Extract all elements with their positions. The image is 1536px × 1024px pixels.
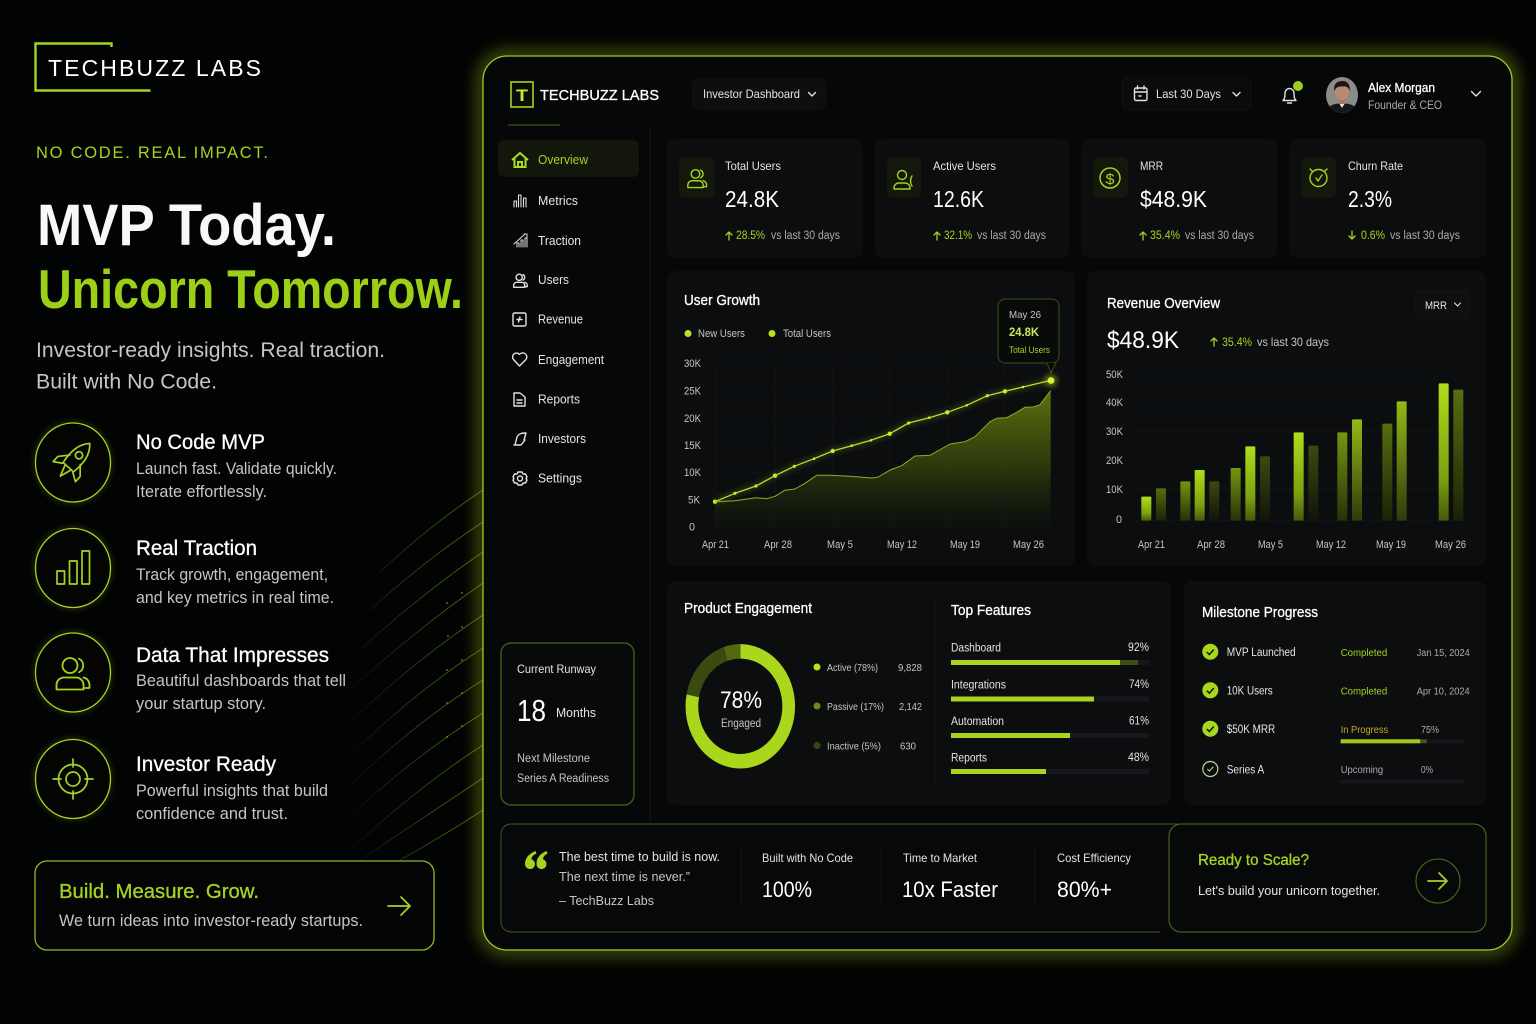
quote: The best time to build is now. — [559, 850, 720, 864]
donut label: Engaged — [721, 718, 761, 730]
y axis labels: 0 — [1116, 514, 1122, 526]
tooltip — [998, 299, 1059, 373]
feature: data that impresses: your startup story. — [136, 695, 266, 713]
kpi: churn rate: 0.6% — [1361, 230, 1385, 242]
feature: no code mvp: Iterate effortlessly. — [136, 483, 267, 501]
y axis labels: 30K — [684, 358, 702, 370]
feature: investor ready: Powerful insights that build — [136, 782, 328, 800]
x axis labels — [702, 539, 1044, 551]
icon: quote mark — [525, 851, 548, 869]
mrr selector: MRR — [1425, 300, 1447, 312]
y axis labels: 30K — [1106, 426, 1124, 438]
feature bar: reports: 48% — [1128, 752, 1149, 764]
bar chart — [1135, 374, 1468, 521]
feature bar: automation: Automation — [951, 716, 1004, 728]
user name: Alex Morgan — [1368, 81, 1435, 95]
kpi: churn rate — [1289, 139, 1486, 258]
total users line — [713, 380, 1051, 504]
nav: overview active — [498, 140, 639, 177]
milestone: 50k mrr: $50K MRR — [1227, 724, 1275, 736]
panel: current runway: Next Milestone — [517, 753, 590, 765]
callout: build measure grow — [35, 861, 434, 950]
kpi: total users: vs last 30 days — [771, 230, 840, 242]
kpi: mrr: $ — [1106, 171, 1115, 188]
tagline: NO CODE. REAL IMPACT. — [36, 144, 268, 162]
dashboard logo: TECHBUZZ LABS — [540, 88, 659, 104]
legend: Total Users — [783, 328, 831, 340]
nav: revenue: Revenue — [538, 312, 583, 326]
decorative specks — [446, 592, 463, 738]
nav: revenue — [513, 312, 583, 326]
panel: current runway: Months — [556, 706, 596, 720]
y axis labels — [1106, 369, 1124, 526]
intro text — [36, 338, 385, 394]
headline: MVP Today. — [37, 193, 336, 258]
y axis labels: 20K — [684, 413, 702, 425]
icon: notification bell — [1283, 81, 1303, 103]
y axis labels: 25K — [684, 386, 702, 398]
feature bar: reports: Reports — [951, 752, 987, 764]
feature: no code mvp — [36, 423, 337, 502]
panel: milestone progress — [1184, 581, 1486, 805]
kpi: active users — [875, 139, 1069, 258]
x axis labels: May 19 — [950, 539, 980, 551]
x axis labels: May 19 — [1376, 539, 1406, 551]
kpi: churn rate: 2.3% — [1348, 186, 1392, 212]
x axis labels: May 12 — [1316, 539, 1346, 551]
call to action: ready to scale — [1169, 824, 1486, 932]
panel: current runway: Series A Readiness — [517, 773, 609, 785]
feature bar: integrations — [951, 679, 1149, 702]
call to action: ready to scale: Ready to Scale? — [1198, 852, 1309, 869]
heading: top features: Top Features — [951, 603, 1031, 619]
nav: metrics: Metrics — [538, 194, 578, 208]
dashboard logo — [508, 82, 659, 125]
feature bar: integrations: 74% — [1129, 679, 1149, 691]
x axis labels: Apr 28 — [1197, 539, 1225, 551]
feature: investor ready — [36, 740, 328, 823]
donut chart — [692, 651, 789, 761]
tooltip: May 26 — [1009, 309, 1041, 321]
y axis labels — [684, 358, 702, 534]
user name — [1368, 81, 1480, 112]
donut legend: 630 — [900, 740, 916, 752]
milestone: 50k mrr — [1202, 721, 1464, 743]
intro text: Built with No Code. — [36, 370, 217, 394]
revenue value: $48.9K — [1107, 327, 1179, 354]
investor dashboard dropdown — [692, 78, 826, 110]
kpi: active users: Active Users — [933, 159, 996, 173]
mrr selector — [1415, 291, 1469, 318]
nav: reports — [514, 392, 580, 406]
heading: revenue overview: Revenue Overview — [1107, 296, 1220, 312]
feature bar: dashboard: 92% — [1128, 642, 1149, 654]
milestone: 50k mrr: 75% — [1421, 724, 1439, 736]
feature bar: integrations: Integrations — [951, 680, 1006, 692]
x axis labels: Apr 21 — [702, 539, 729, 551]
milestone: mvp launched: Completed — [1341, 647, 1387, 659]
stat: built with no code: 100% — [762, 877, 812, 902]
date range dropdown — [1122, 78, 1251, 110]
panel: current runway: Current Runway — [517, 662, 596, 676]
kpi: mrr: $48.9K — [1140, 186, 1208, 212]
quote: – TechBuzz Labs — [559, 894, 654, 908]
milestone: series a: 0% — [1421, 764, 1433, 776]
heading: milestone progress: Milestone Progress — [1202, 605, 1318, 621]
panel: current runway: 18 — [517, 693, 546, 728]
panel: product engagement and top features — [667, 581, 1171, 805]
revenue delta: vs last 30 days — [1257, 335, 1329, 349]
feature bar: automation: 61% — [1129, 716, 1149, 728]
highlighted data point — [1045, 374, 1057, 386]
nav: engagement: Engagement — [538, 353, 604, 367]
legend: New Users — [698, 328, 745, 340]
heading: user growth: User Growth — [684, 293, 760, 309]
feature: data that impresses: Data That Impresses — [136, 643, 329, 667]
dashboard logo: T — [516, 86, 529, 105]
kpi: total users: 28.5% — [736, 230, 765, 242]
y axis labels: 40K — [1106, 397, 1124, 409]
milestone: series a — [1203, 762, 1464, 783]
stat: time to market — [902, 851, 998, 902]
nav: traction: Traction — [538, 234, 581, 248]
x axis labels: Apr 28 — [764, 539, 792, 551]
feature: real traction — [36, 528, 334, 608]
donut legend: 9,828 — [898, 662, 922, 674]
stat: time to market: 10x Faster — [902, 877, 998, 902]
nav: users — [514, 273, 569, 287]
legend — [684, 328, 831, 340]
callout: build measure grow: We turn ideas into investor-ready startups. — [59, 912, 363, 930]
x axis labels: May 5 — [827, 539, 853, 551]
call to action: ready to scale: Let's build your unicorn together. — [1198, 884, 1380, 898]
kpi: total users: 24.8K — [725, 186, 780, 212]
donut legend: Passive (17%) — [827, 701, 884, 713]
kpi: churn rate: vs last 30 days — [1390, 230, 1460, 242]
callout: build measure grow: Build. Measure. Grow. — [59, 880, 259, 903]
kpi: active users: 12.6K — [933, 186, 985, 212]
kpi: active users: vs last 30 days — [977, 230, 1046, 242]
milestone: 10k users — [1202, 682, 1470, 698]
milestone: 10k users: Completed — [1341, 686, 1387, 698]
milestone: 10k users: 10K Users — [1227, 686, 1273, 698]
revenue delta — [1211, 335, 1329, 349]
headline — [37, 193, 463, 320]
stat: cost efficiency: 80%+ — [1057, 877, 1112, 902]
date range dropdown: Last 30 Days — [1156, 87, 1221, 101]
revenue delta: 35.4% — [1222, 335, 1252, 349]
y axis labels: 0 — [689, 522, 695, 534]
kpi: churn rate: Churn Rate — [1348, 159, 1403, 173]
y axis labels: 5K — [688, 494, 701, 506]
panel: revenue overview — [1087, 271, 1486, 566]
nav: traction — [514, 234, 581, 248]
y axis labels: 20K — [1106, 455, 1124, 467]
investor dashboard dropdown: Investor Dashboard — [703, 87, 800, 101]
decorative wave lines — [335, 490, 483, 860]
x axis labels: May 26 — [1013, 539, 1044, 551]
kpi: mrr: MRR — [1140, 159, 1163, 173]
kpi: mrr: 35.4% — [1150, 230, 1180, 242]
area fill — [715, 391, 1051, 527]
milestone: series a: Upcoming — [1341, 764, 1383, 776]
x axis labels: May 5 — [1258, 539, 1283, 551]
feature bar: automation — [951, 716, 1149, 738]
nav: metrics — [514, 194, 578, 208]
nav: settings — [513, 472, 582, 486]
nav: engagement — [513, 353, 604, 367]
feature bar: dashboard: Dashboard — [951, 642, 1001, 654]
brand logo: TECHBUZZ LABS — [48, 55, 261, 81]
x axis labels: Apr 21 — [1138, 539, 1165, 551]
feature: investor ready: confidence and trust. — [136, 805, 288, 823]
stat: cost efficiency: Cost Efficiency — [1057, 851, 1131, 865]
avatar — [1326, 77, 1358, 113]
feature: investor ready: Investor Ready — [136, 752, 276, 776]
donut label — [720, 687, 762, 730]
donut legend: Active (78%) — [827, 662, 878, 674]
dashboard panel — [483, 56, 1512, 950]
feature: real traction: Real Traction — [136, 536, 257, 560]
nav: reports: Reports — [538, 392, 580, 406]
stat: time to market: Time to Market — [903, 851, 978, 865]
stat: built with no code: Built with No Code — [762, 851, 853, 865]
y axis labels: 10K — [1106, 484, 1124, 496]
tooltip: Total Users — [1009, 345, 1050, 355]
quote: The next time is never.” — [559, 870, 690, 884]
nav: investors: Investors — [538, 432, 586, 446]
heading: product engagement: Product Engagement — [684, 601, 812, 617]
panel: current runway — [501, 643, 634, 805]
nav: settings: Settings — [538, 472, 582, 486]
feature bar: reports — [951, 752, 1149, 774]
kpi: total users: Total Users — [725, 159, 781, 173]
milestone: mvp launched — [1202, 644, 1470, 660]
milestone: mvp launched: MVP Launched — [1227, 647, 1296, 659]
donut legend: Inactive (5%) — [827, 740, 881, 752]
feature: no code mvp: No Code MVP — [136, 430, 265, 454]
feature bar: dashboard — [951, 642, 1149, 665]
intro text: Investor-ready insights. Real traction. — [36, 338, 385, 362]
brand logo — [36, 44, 261, 90]
nav: investors — [514, 432, 586, 446]
nav: users: Users — [538, 273, 569, 287]
donut label: 78% — [720, 687, 762, 714]
y axis labels: 15K — [684, 440, 702, 452]
footer stats strip — [501, 824, 1178, 932]
headline: Unicorn Tomorrow. — [38, 258, 463, 320]
kpi: total users — [667, 139, 863, 258]
kpi: active users: 32.1% — [944, 230, 972, 242]
kpi: mrr — [1081, 139, 1277, 258]
x axis labels: May 26 — [1435, 539, 1466, 551]
sidebar divider — [649, 125, 651, 822]
quote — [559, 850, 720, 908]
feature: data that impresses — [36, 633, 346, 713]
feature: real traction: Track growth, engagement, — [136, 566, 328, 584]
tooltip: 24.8K — [1009, 325, 1039, 339]
new users line — [715, 391, 1051, 502]
y axis labels: 10K — [684, 467, 702, 479]
donut legend: 2,142 — [899, 701, 922, 713]
stat: built with no code — [762, 851, 853, 902]
milestone: 50k mrr: In Progress — [1341, 724, 1388, 736]
feature: real traction: and key metrics in real time. — [136, 589, 334, 607]
feature: data that impresses: Beautiful dashboards that tell — [136, 672, 346, 690]
kpi: mrr: vs last 30 days — [1185, 230, 1254, 242]
x axis labels — [1138, 539, 1466, 551]
x axis labels: May 12 — [887, 539, 917, 551]
y axis labels: 50K — [1106, 369, 1124, 381]
milestone: mvp launched: Jan 15, 2024 — [1417, 648, 1470, 659]
user name: Founder & CEO — [1368, 98, 1442, 112]
milestone: 10k users: Apr 10, 2024 — [1417, 686, 1470, 698]
donut legend — [814, 662, 922, 752]
panel: user growth — [667, 271, 1075, 566]
nav: overview active: Overview — [538, 153, 589, 167]
feature: no code mvp: Launch fast. Validate quickly. — [136, 460, 337, 478]
stat: cost efficiency — [1057, 851, 1131, 902]
milestone: series a: Series A — [1227, 764, 1264, 776]
